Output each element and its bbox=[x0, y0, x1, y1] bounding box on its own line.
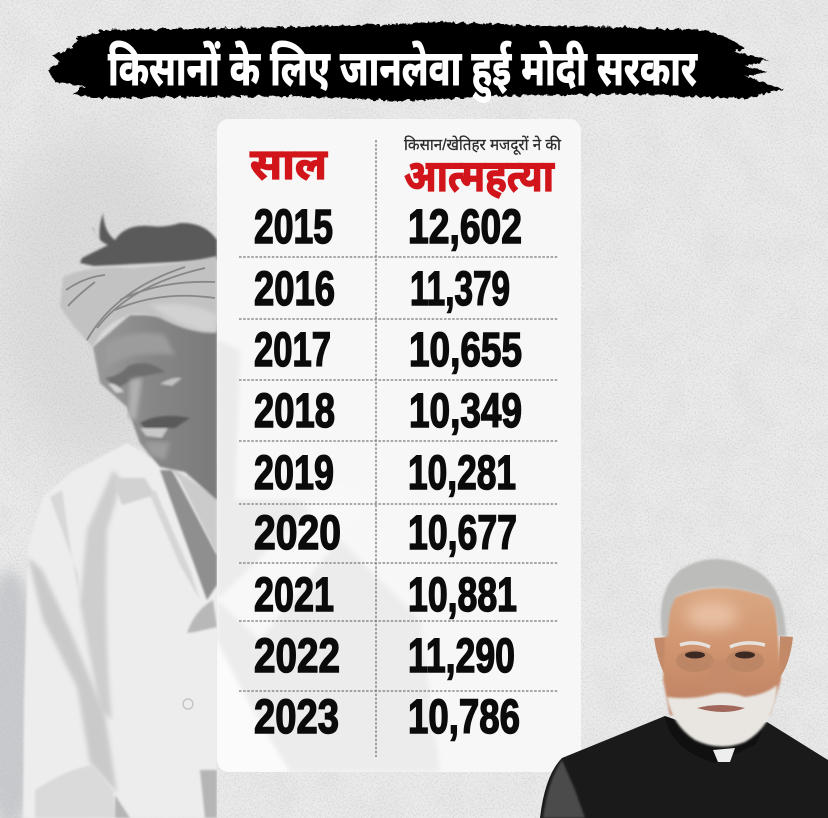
face bbox=[663, 588, 781, 715]
table rows bbox=[254, 201, 522, 744]
table rows: 2016 bbox=[254, 263, 335, 316]
nose bbox=[706, 660, 738, 688]
farmer shirt bbox=[23, 443, 217, 818]
table rows: 2022 bbox=[254, 630, 340, 683]
illustration: Modi portrait bbox=[540, 559, 828, 818]
table rows: 10,677 bbox=[408, 507, 517, 560]
illustration: farmer photo bbox=[23, 213, 217, 818]
title banner: black brush stroke bbox=[48, 22, 785, 103]
suit bbox=[540, 716, 828, 818]
table rows: 2017 bbox=[254, 324, 331, 377]
mouth bbox=[697, 705, 745, 712]
table rows: 10,881 bbox=[408, 569, 517, 622]
panel: data table card bbox=[217, 119, 581, 772]
table grid bbox=[239, 140, 558, 757]
farmer turban bbox=[60, 256, 217, 347]
table rows: 11,290 bbox=[408, 630, 515, 683]
collar bbox=[665, 716, 767, 763]
table rows: 2021 bbox=[254, 569, 334, 622]
hair bbox=[661, 559, 786, 636]
ears bbox=[654, 636, 793, 680]
table rows: 11,379 bbox=[410, 263, 510, 316]
table rows: 10,786 bbox=[408, 691, 520, 744]
ghost of farmer behind card bbox=[217, 340, 440, 772]
table rows: 2018 bbox=[254, 385, 335, 438]
table rows: 2015 bbox=[254, 201, 333, 254]
table rows: 10,655 bbox=[409, 324, 522, 377]
glasses and eyes bbox=[676, 643, 765, 672]
table rows: 12,602 bbox=[408, 201, 522, 254]
column heading: suicides: आत्महत्या bbox=[404, 152, 555, 201]
farmer neck and face bbox=[93, 315, 217, 500]
table rows: 2020 bbox=[254, 507, 341, 560]
table rows: 2023 bbox=[254, 691, 339, 744]
table rows: 10,349 bbox=[409, 385, 522, 438]
beard bbox=[667, 685, 777, 747]
column subheading: farmers and labourers: किसान/खेतिहर मजदूरों ने की bbox=[404, 135, 562, 155]
table rows: 2019 bbox=[254, 447, 334, 500]
column heading: year: साल bbox=[250, 141, 328, 189]
table rows: 10,281 bbox=[408, 447, 516, 500]
farmer hair bbox=[80, 213, 217, 266]
